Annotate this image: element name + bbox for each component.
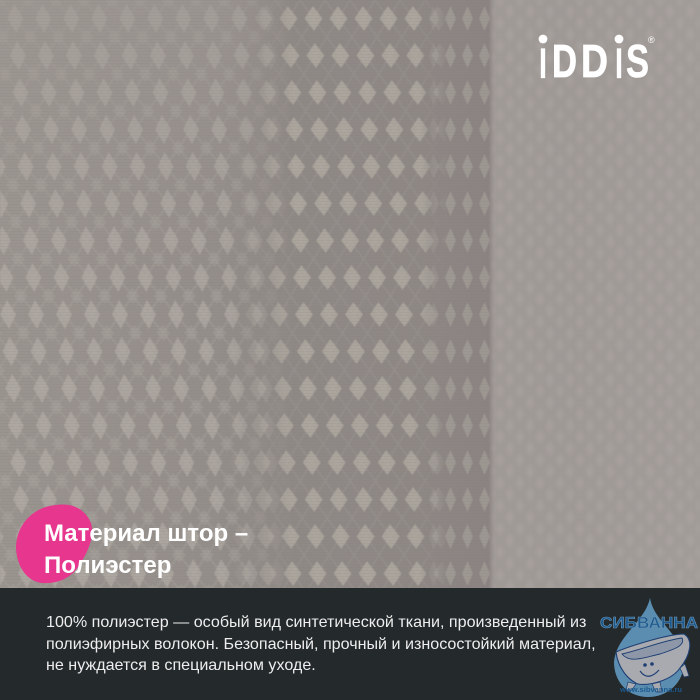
brand logo: iddis: I [616, 42, 622, 86]
body text [46, 613, 596, 674]
website: www.sibvanna.ru [619, 685, 682, 694]
heading: Материал штор – [44, 520, 248, 547]
heading [44, 520, 248, 579]
body text: полиэфирных волокон. Безопасный, прочный и износостойкий материал, [46, 634, 596, 652]
brand logo: iddis: S [626, 35, 649, 87]
bathtub [616, 634, 690, 692]
brand logo: iddis: I [540, 42, 546, 86]
body text: не нуждается в специальном уходе. [46, 656, 316, 674]
brand logo: iddis [538, 34, 655, 87]
bottom information bar [0, 588, 700, 700]
brand logo: iddis: D [552, 35, 577, 87]
brand logo: iddis: D [581, 35, 608, 87]
watermark: sibvanna logo [600, 598, 698, 697]
body text: 100% полиэстер — особый вид синтетической ткани, произведенный из [46, 613, 586, 631]
wordmark: СИБВАННА [600, 615, 698, 632]
brand logo: iddis: ® [648, 35, 655, 45]
heading: Полиэстер [44, 552, 171, 579]
water drop [614, 598, 684, 697]
